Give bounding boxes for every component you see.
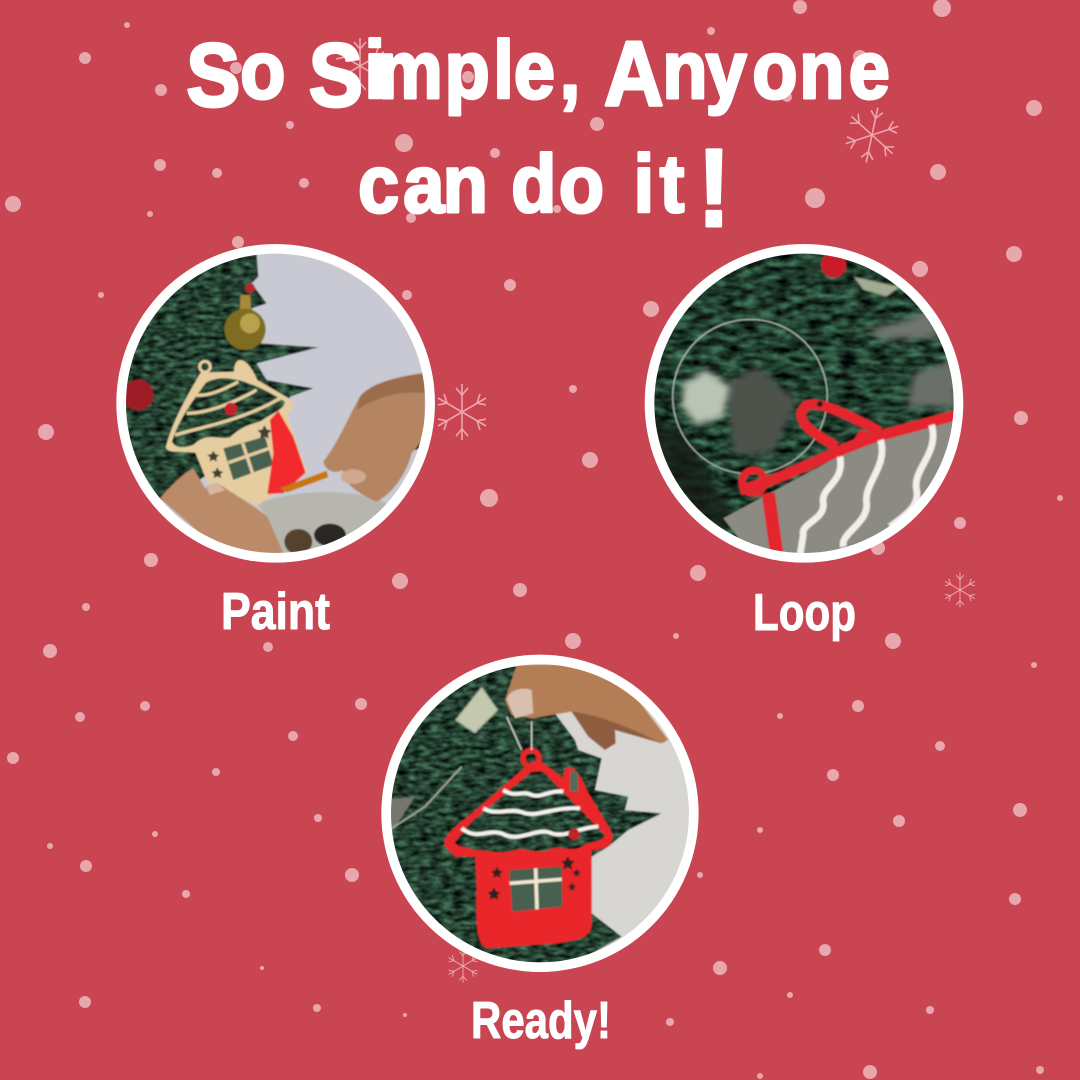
label: Ready!: Ready! [471, 992, 611, 1050]
title: A [604, 22, 664, 125]
title: imple, [365, 23, 606, 116]
snowflakes [336, 38, 975, 983]
loop scene [654, 254, 954, 553]
title: nyone [662, 23, 890, 116]
title: can [358, 137, 507, 230]
title [186, 22, 890, 250]
title: it [634, 137, 684, 230]
label: Loop: Loop [753, 584, 856, 642]
title: o [240, 23, 291, 116]
photo: finished ornament [375, 650, 705, 980]
photo: adding the loop [640, 240, 970, 570]
white ring [381, 655, 699, 972]
title: do [511, 137, 633, 230]
white ring [645, 244, 963, 563]
title: S [186, 25, 240, 126]
title: S [309, 25, 363, 126]
paint scene [126, 254, 426, 553]
label: Paint: Paint [221, 583, 330, 641]
title: ! [698, 127, 730, 250]
ready scene [391, 664, 689, 962]
photo: painting the ornament [110, 240, 440, 570]
white ring [116, 244, 435, 563]
